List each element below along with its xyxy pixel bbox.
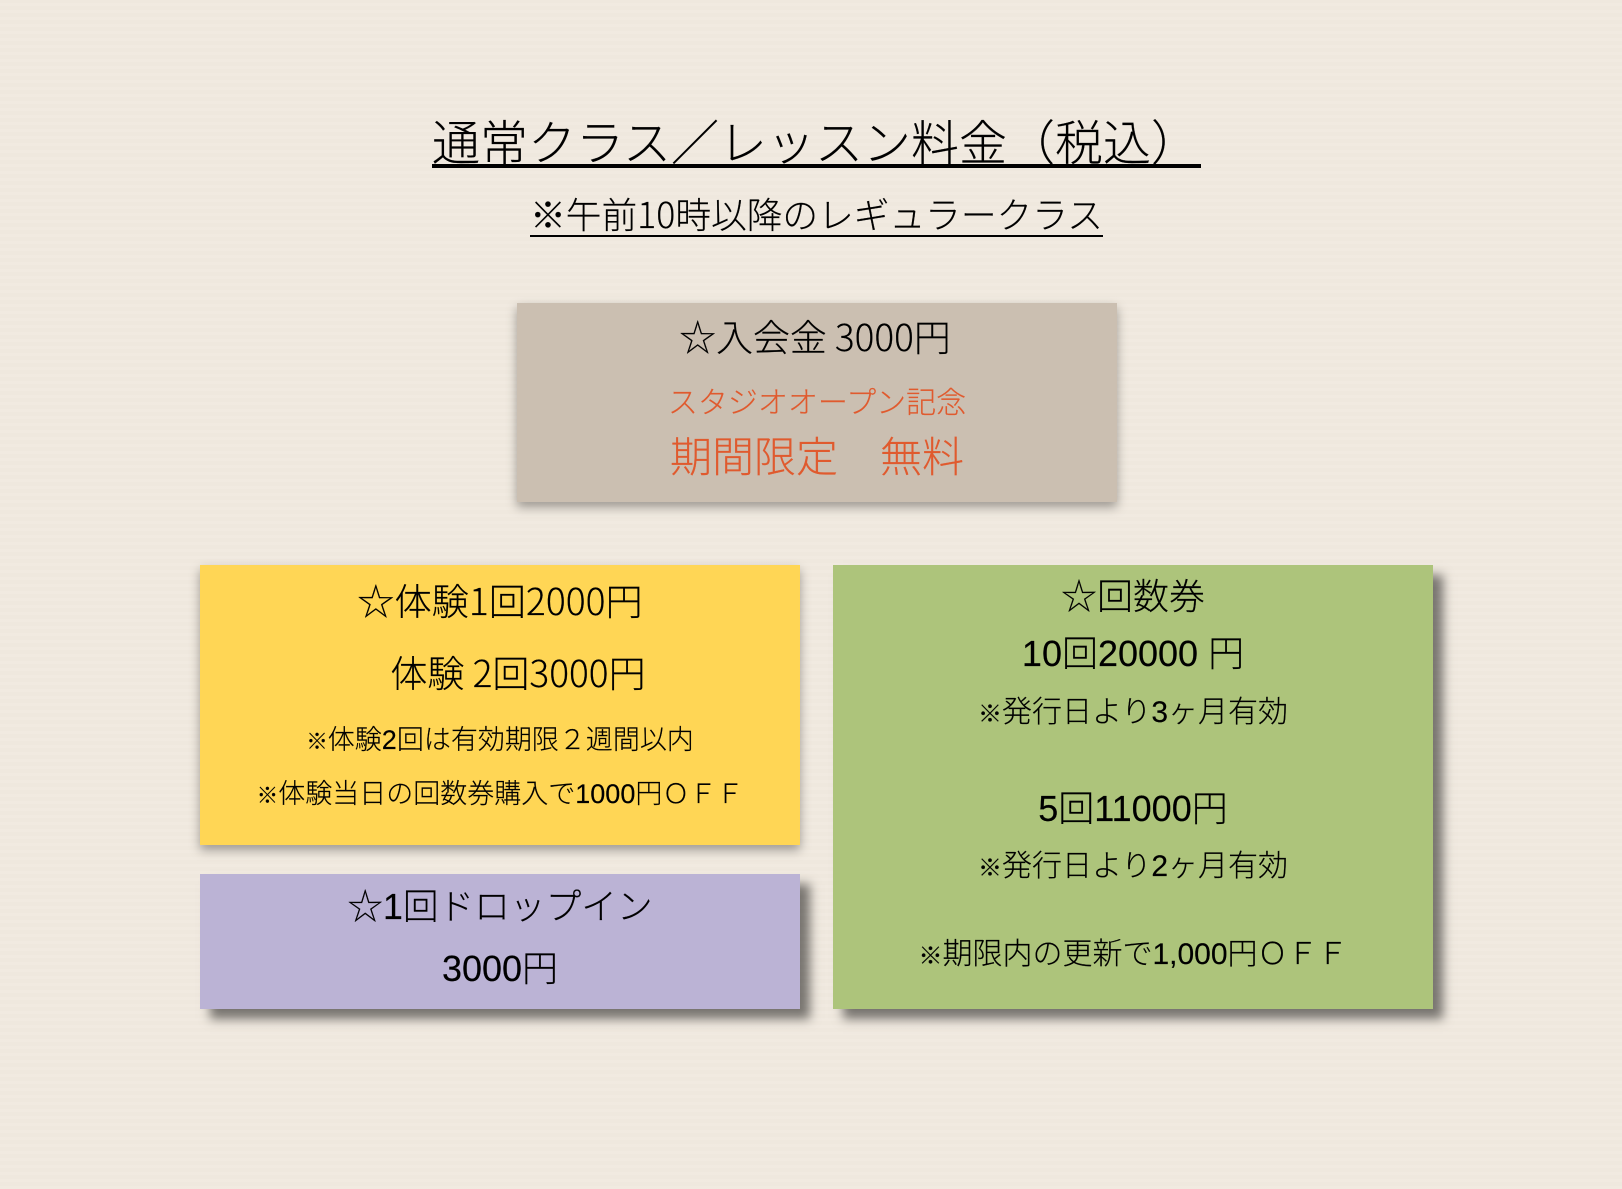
entrance fee price: ☆入会金 3000円 [679, 308, 951, 362]
panel: coupons [833, 565, 1433, 1009]
studio opening note: スタジオオープン記念 [668, 387, 966, 420]
title: 通常クラス／レッスン料金（税込） [432, 118, 1199, 171]
five-visit price: 5回11000円 [1038, 788, 1228, 829]
trial validity note: ※体験2回は有効期限２週間以内 [306, 725, 694, 755]
trial discount note: ※体験当日の回数券購入で1000円ＯＦＦ [257, 779, 743, 809]
five-visit validity: ※発行日より2ヶ月有効 [978, 850, 1288, 883]
panel: trial [200, 565, 800, 845]
ten-visit validity: ※発行日より3ヶ月有効 [978, 696, 1288, 729]
renewal discount: ※期限内の更新で1,000円ＯＦＦ [918, 938, 1348, 971]
drop-in price: 3000円 [442, 948, 558, 989]
coupons heading: ☆回数券 [1061, 576, 1205, 617]
panel: drop-in [200, 874, 800, 1009]
subtitle: ※午前10時以降のレギュラークラス [530, 188, 1103, 239]
panel: entrance fee [517, 303, 1117, 502]
drop-in heading: ☆1回ドロップイン [347, 887, 653, 927]
trial one price: ☆体験1回2000円 [357, 572, 643, 626]
free campaign: 期間限定 無料 [670, 434, 964, 481]
trial two price: 体験 2回3000円 [390, 644, 646, 698]
ten-visit price: 10回20000 円 [1022, 633, 1244, 674]
